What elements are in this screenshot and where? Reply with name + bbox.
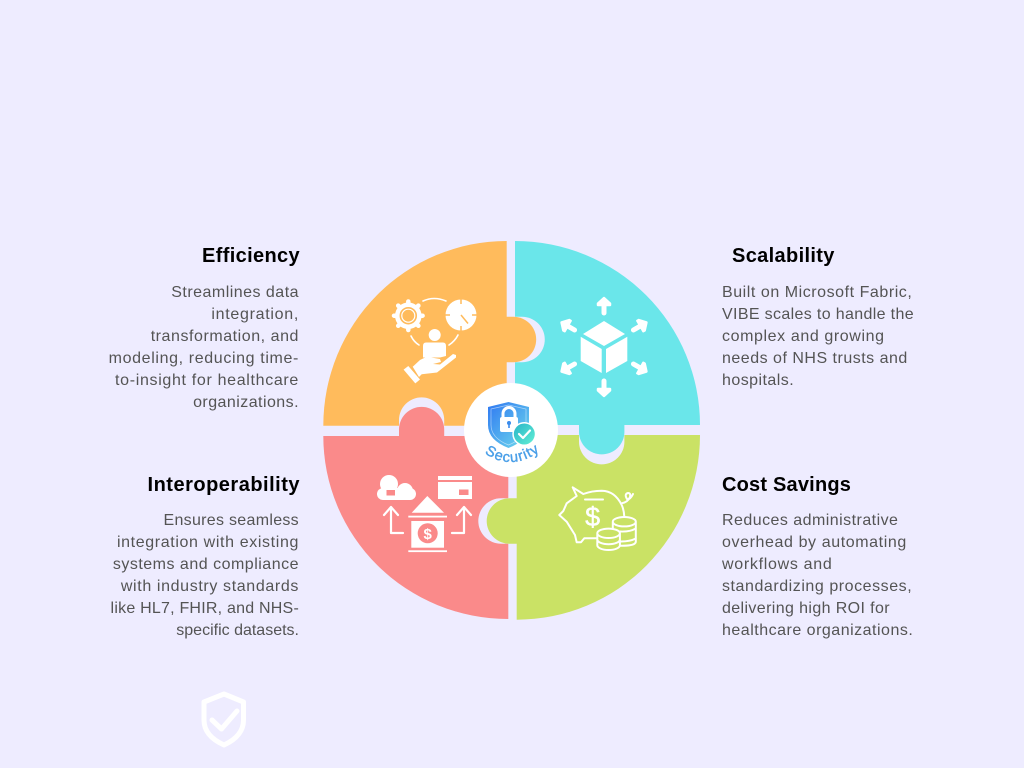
panel: cost savings text	[721, 474, 913, 639]
knob: orange	[506, 317, 536, 362]
security label: Security	[486, 445, 538, 462]
icon: bank, cloud and card	[377, 475, 472, 552]
icon: white shield with check	[204, 694, 244, 745]
knob shadow: orange	[515, 317, 545, 362]
hand	[404, 366, 420, 383]
text block: Efficiency description: transformation, and	[151, 328, 299, 345]
piggy body	[559, 487, 624, 542]
text block: Scalability description: Built on Microsoft Fabric,	[722, 284, 912, 301]
icon: bank, cloud and card: $	[424, 526, 433, 543]
icon: gear, clock and person on hand	[394, 298, 476, 383]
text block: Efficiency description: to-insight for healthcare	[115, 372, 299, 389]
connecting arcs	[411, 298, 458, 345]
panel: efficiency text	[109, 245, 301, 411]
text block: Efficiency description: Streamlines data	[171, 284, 299, 301]
text block: Interoperability description: integration with existing	[117, 534, 299, 551]
icon: piggy bank with coins	[559, 487, 636, 550]
text block: Efficiency description: modeling, reducing time-	[109, 350, 299, 367]
puzzle piece: pink quadrant	[323, 436, 508, 619]
text block: Cost Savings description: workflows and	[721, 556, 832, 573]
text block: Efficiency description: integration,	[211, 306, 299, 323]
puzzle piece: teal quadrant	[515, 241, 700, 425]
knob shadow: green	[478, 498, 509, 544]
knob shadow: pink	[399, 397, 444, 427]
heading: Scalability: Scalability	[732, 245, 835, 267]
puzzle piece: orange quadrant	[323, 241, 507, 426]
panel: scalability text	[722, 245, 914, 389]
padlock	[503, 408, 515, 418]
cloud	[377, 475, 416, 500]
card	[438, 476, 472, 499]
text block: Interoperability description: Ensures seamless	[163, 512, 299, 529]
text block: Cost Savings description: Reduces administrative	[722, 512, 898, 529]
security badge	[464, 383, 558, 477]
arrows	[384, 507, 471, 533]
white circle	[464, 383, 558, 477]
puzzle piece: green quadrant	[517, 435, 700, 620]
cube	[583, 321, 625, 346]
puzzle diagram	[323, 241, 700, 620]
text block: Scalability description: needs of NHS trusts and	[722, 350, 908, 367]
heading: Efficiency: Efficiency	[202, 245, 301, 267]
knob: green	[487, 498, 518, 544]
text block: Interoperability description: with industry standards	[120, 578, 299, 595]
text block: Scalability description: VIBE scales to handle the	[722, 306, 914, 323]
arrows	[598, 298, 610, 313]
icon: expanding cube	[559, 298, 649, 396]
text block: Scalability description: hospitals.	[722, 372, 794, 389]
clock	[446, 300, 476, 330]
gear	[394, 302, 423, 330]
tail	[622, 493, 633, 503]
text block: Interoperability description: specific datasets.	[176, 622, 299, 639]
knob: teal	[579, 424, 624, 454]
heading: Cost Savings: Cost Savings	[722, 474, 851, 496]
knob shadow: teal	[579, 434, 624, 464]
coin slot	[585, 498, 603, 500]
dollar sign: $	[585, 502, 600, 532]
text block: Cost Savings description: delivering high ROI for	[722, 600, 890, 617]
text block: Cost Savings description: overhead by automating	[722, 534, 907, 551]
check badge	[512, 422, 536, 446]
text block: Interoperability description: like HL7, FHIR, and NHS-	[111, 600, 299, 617]
panel: interoperability text	[111, 474, 300, 639]
coin stacks	[613, 517, 636, 546]
arc guide for label	[483, 450, 542, 462]
text block: Cost Savings description: healthcare organizations.	[722, 622, 913, 639]
text block: Scalability description: complex and growing	[722, 328, 885, 345]
shield inner rim	[491, 405, 526, 445]
shield	[488, 402, 529, 448]
text block: Efficiency description: organizations.	[193, 394, 299, 411]
person	[429, 329, 441, 341]
heading: Interoperability: Interoperability	[148, 474, 300, 496]
bank	[412, 496, 444, 513]
knob: pink	[399, 407, 444, 437]
text block: Interoperability description: systems and compliance	[113, 556, 299, 573]
text block: Cost Savings description: standardizing processes,	[722, 578, 912, 595]
